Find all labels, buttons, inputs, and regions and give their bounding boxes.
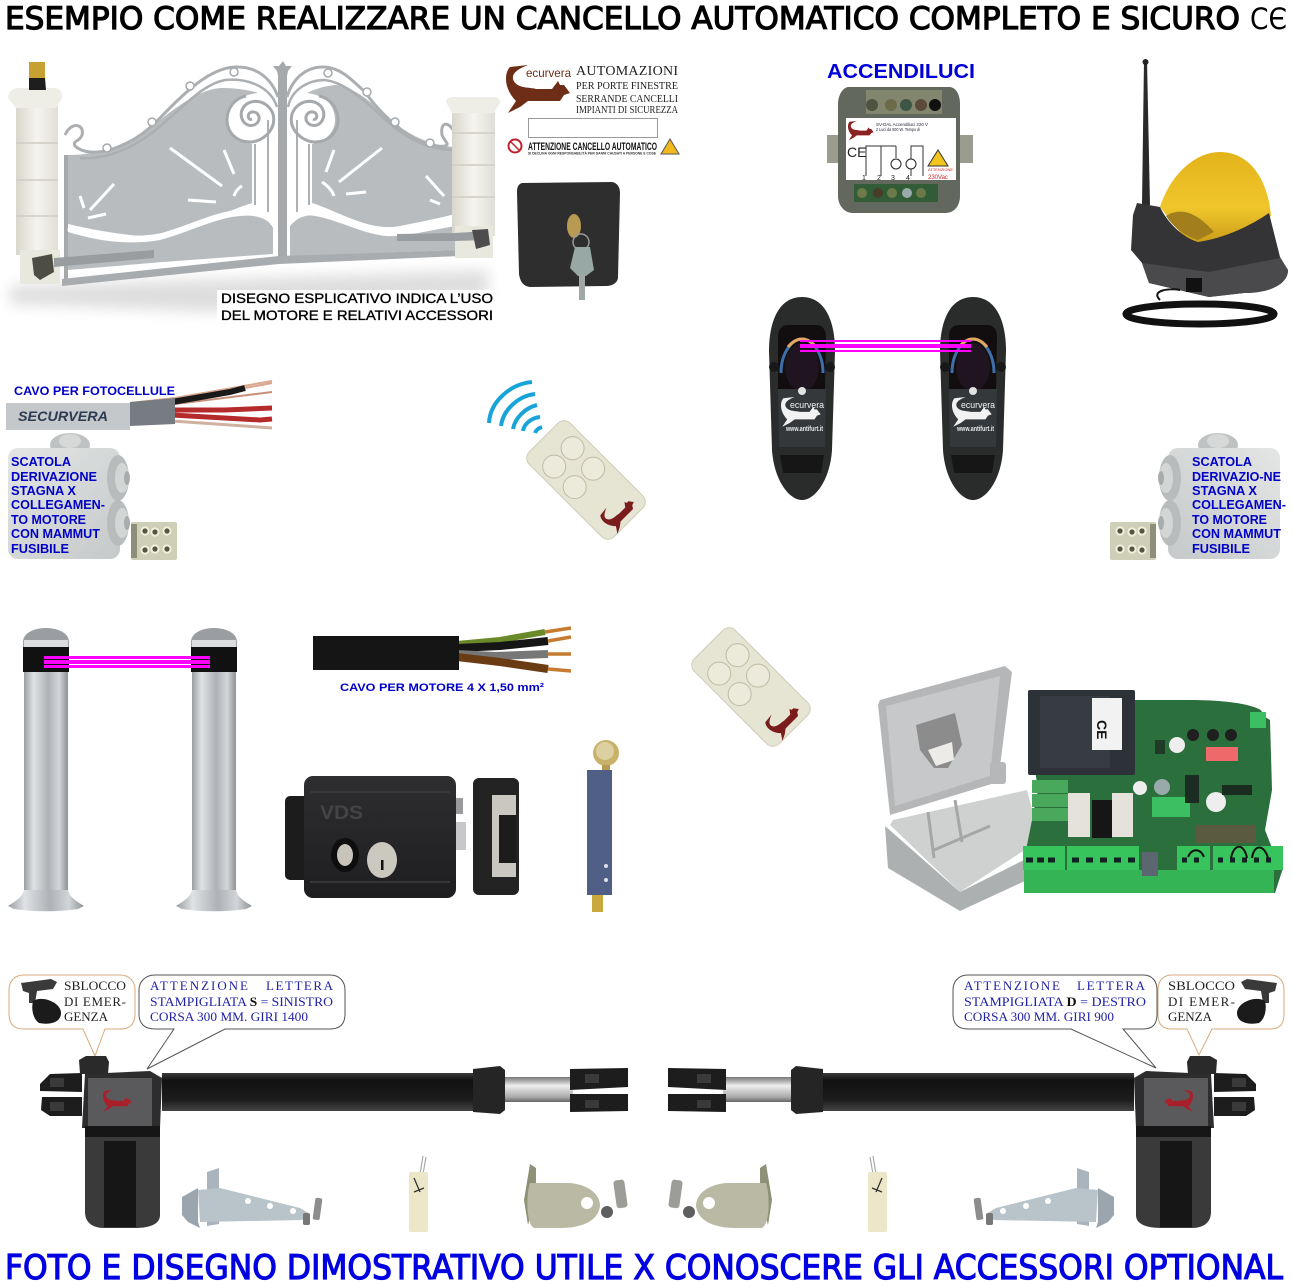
callout: emergency release right: DI EMER- bbox=[1168, 994, 1235, 1009]
photocell pair with beams: www.antifurt.it bbox=[785, 426, 824, 433]
callout: left motor note: CORSA 300 MM. GIRI 1400 bbox=[150, 1009, 308, 1024]
callout: left motor note: ATTENZIONE bbox=[150, 978, 248, 993]
junction box right: CON MAMMUT bbox=[1192, 526, 1281, 541]
junction box right: TO MOTORE bbox=[1192, 512, 1267, 527]
sign: Securvera warning plate: ATTENZIONE CANCELLO AUTOMATICO bbox=[528, 141, 657, 153]
callout: emergency release left: DI EMER- bbox=[64, 994, 126, 1009]
caption: gate drawing bbox=[217, 290, 497, 323]
label: motor cable: CAVO PER MOTORE 4 X 1,50 mm² bbox=[340, 682, 544, 694]
control board bbox=[1023, 690, 1283, 893]
junction box left: COLLEGAMEN- bbox=[11, 497, 105, 512]
photocell pair with beams: ecurvera bbox=[790, 400, 824, 410]
sign: Securvera warning plate bbox=[506, 64, 679, 156]
callout: left motor note: LETTERA bbox=[266, 978, 334, 993]
sign: Securvera warning plate: SI DECLINA OGNI RESPONSABILITÀ PER DANNI CAUSATI A PERSONE E COSE bbox=[528, 150, 656, 156]
icon: right fork bracket bbox=[668, 1164, 772, 1228]
bollard photocells with beams bbox=[8, 628, 252, 911]
cable: photocell bbox=[6, 381, 272, 430]
callout: right motor note: ATTENZIONE bbox=[964, 978, 1060, 993]
icon: flashing lamp with antenna bbox=[1126, 59, 1288, 324]
icon: right capacitor bbox=[868, 1156, 887, 1232]
device: light switch module bbox=[827, 87, 973, 213]
caption: gate drawing: DISEGNO ESPLICATIVO INDICA L’USO bbox=[221, 290, 493, 306]
device: light switch module: 2 Luci da 500 W. Tempo di bbox=[876, 127, 920, 132]
sign: Securvera warning plate: SERRANDE CANCELLI bbox=[576, 94, 678, 105]
icon: remote control bbox=[688, 624, 814, 750]
junction box left bbox=[8, 433, 177, 560]
control box enclosure bbox=[878, 666, 1040, 911]
junction box left: STAGNA X bbox=[11, 483, 76, 498]
icon: right mounting bracket bbox=[973, 1168, 1114, 1228]
callout: emergency release right: GENZA bbox=[1168, 1009, 1213, 1024]
label: accendiluci: ACCENDILUCI bbox=[827, 61, 975, 83]
junction box right bbox=[1110, 433, 1286, 560]
callout: right motor note: CORSA 300 MM. GIRI 900 bbox=[964, 1009, 1114, 1024]
callout: emergency release left bbox=[9, 975, 135, 1056]
icon: left fork bracket bbox=[524, 1164, 628, 1228]
title: CЄ bbox=[1250, 2, 1287, 36]
device: light switch module: 1 bbox=[862, 175, 866, 182]
junction box right: DERIVAZIO-NE bbox=[1192, 469, 1281, 484]
photocell pair with beams bbox=[769, 297, 1006, 500]
device: light switch module: 2 bbox=[877, 175, 881, 182]
control board: CE bbox=[1094, 720, 1110, 739]
callout: emergency release left: SBLOCCO bbox=[64, 978, 126, 993]
motor: right actuator bbox=[668, 1056, 1256, 1228]
icon: left capacitor bbox=[409, 1156, 428, 1232]
callout: right motor note: LETTERA bbox=[1077, 978, 1146, 993]
sign: Securvera warning plate: AUTOMAZIONI bbox=[576, 64, 678, 79]
callout: emergency release right bbox=[1158, 975, 1284, 1055]
cable: photocell: SECURVERA bbox=[18, 408, 108, 424]
junction box left: TO MOTORE bbox=[11, 512, 86, 527]
icon: key switch bbox=[517, 182, 620, 300]
junction box right: SCATOLA bbox=[1192, 454, 1253, 469]
photocell pair with beams: ecurvera bbox=[961, 400, 995, 410]
callout: left motor note: STAMPIGLIATA S = SINISTRO bbox=[150, 994, 333, 1009]
sign: Securvera warning plate: PER PORTE FINESTRE bbox=[576, 81, 678, 92]
junction box left: CON MAMMUT bbox=[11, 526, 100, 541]
caption: gate drawing: DEL MOTORE E RELATIVI ACCESSORI bbox=[221, 307, 493, 323]
cable: motor bbox=[313, 628, 571, 671]
junction box right: FUSIBILE bbox=[1192, 541, 1250, 556]
junction box right: STAGNA X bbox=[1192, 483, 1257, 498]
title: ESEMPIO COME REALIZZARE UN CANCELLO AUTOMATICO COMPLETO E SICURO bbox=[5, 1, 1240, 37]
callout: left motor note bbox=[139, 975, 345, 1069]
sign: Securvera warning plate: IMPIANTI DI SICUREZZA bbox=[576, 105, 679, 116]
icon: bolt latch bbox=[587, 740, 619, 912]
junction box left: SCATOLA bbox=[11, 454, 72, 469]
device: light switch module: 3 bbox=[891, 175, 895, 182]
illustration: automatic gate bbox=[8, 61, 500, 312]
motor: left actuator bbox=[40, 1056, 628, 1228]
junction box right: COLLEGAMEN- bbox=[1192, 497, 1286, 512]
callout: right motor note bbox=[953, 975, 1157, 1068]
callout: right motor note: STAMPIGLIATA D = DESTRO bbox=[964, 994, 1146, 1009]
icon: electric lock: VDS bbox=[320, 803, 363, 824]
callout: emergency release right: SBLOCCO bbox=[1168, 978, 1235, 993]
junction box left: FUSIBILE bbox=[11, 541, 69, 556]
icon: electric lock bbox=[285, 776, 519, 898]
label: photocell cable: CAVO PER FOTOCELLULE bbox=[14, 384, 175, 398]
device: light switch module: 230Vac bbox=[928, 175, 948, 181]
icon: left mounting bracket bbox=[182, 1168, 323, 1228]
callout: emergency release left: GENZA bbox=[64, 1009, 109, 1024]
device: light switch module: ATTENZIONE bbox=[928, 167, 953, 172]
junction box left: DERIVAZIONE bbox=[11, 469, 97, 484]
sign: Securvera warning plate: ecurvera bbox=[526, 66, 571, 80]
icon: remote control with signal waves bbox=[489, 382, 649, 543]
device: light switch module: SV-DAL Accendiluci 220 V bbox=[876, 122, 928, 127]
device: light switch module: 4 bbox=[906, 175, 910, 182]
photocell pair with beams: www.antifurt.it bbox=[956, 426, 995, 433]
device: light switch module: CE bbox=[847, 144, 866, 160]
